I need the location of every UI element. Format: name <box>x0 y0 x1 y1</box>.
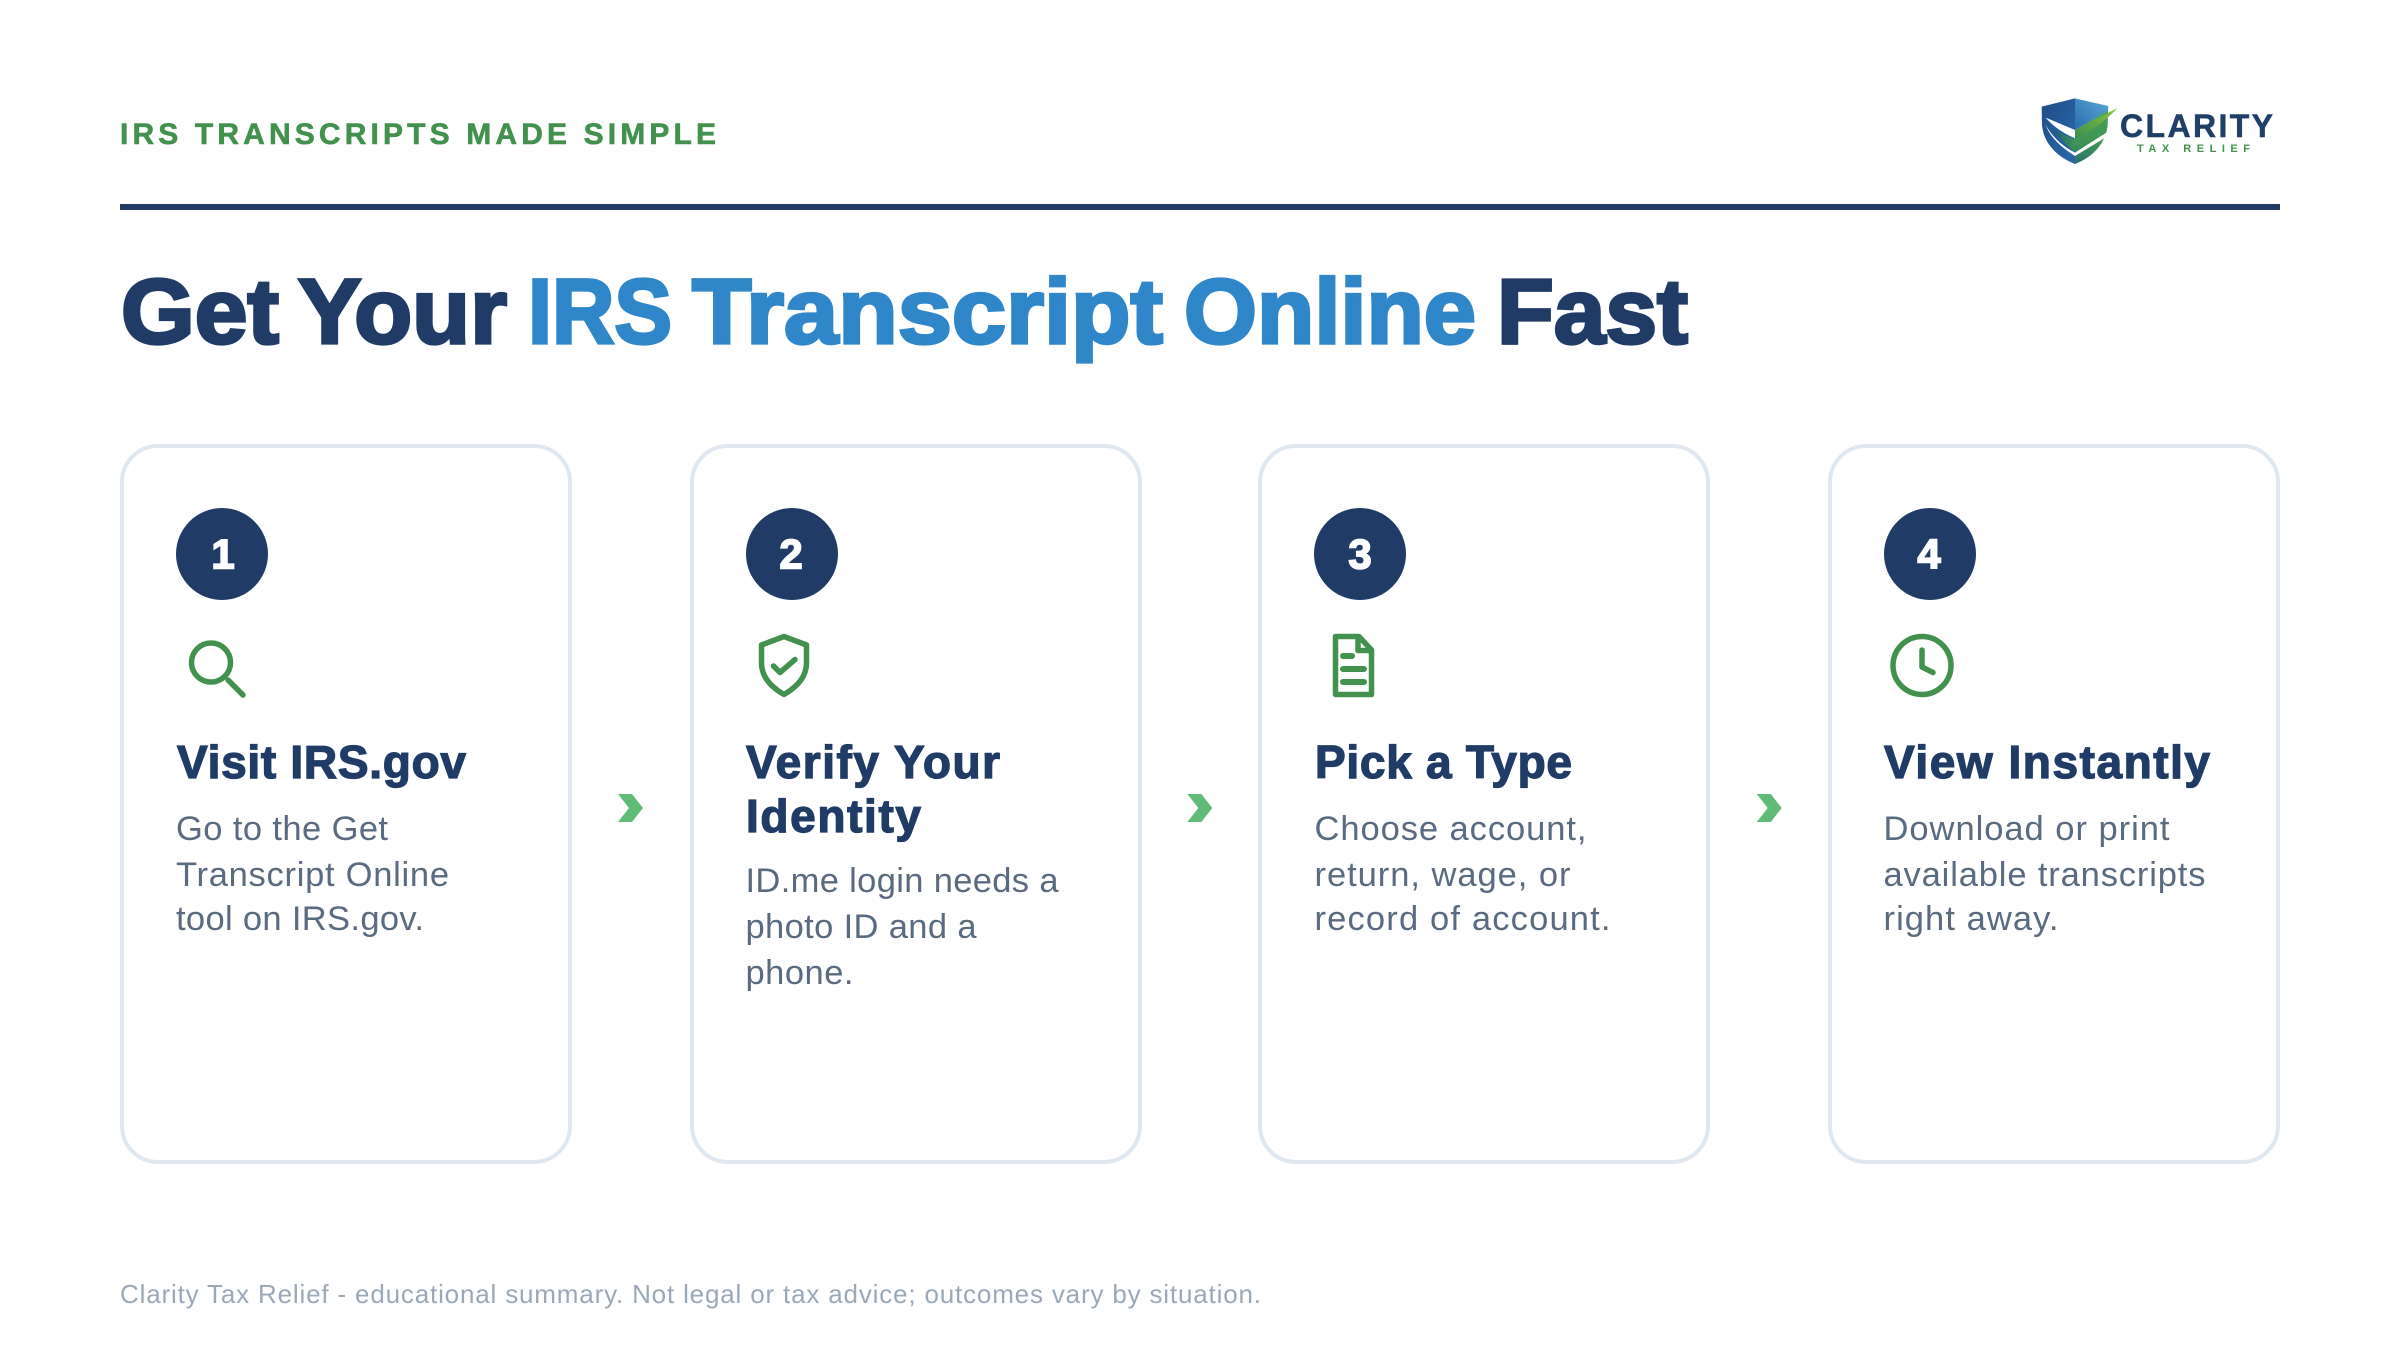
icon: document <box>1336 636 1372 694</box>
description: photo ID and a <box>746 908 977 946</box>
description: phone. <box>746 954 854 992</box>
title: Transcript <box>692 261 1163 363</box>
description: ID.me login needs a <box>746 862 1059 900</box>
title: IRS <box>528 261 672 363</box>
heading: Verify Your Identity: Identity <box>746 790 921 842</box>
step number 4: 4 <box>1917 530 1941 578</box>
logo wordmark: CLARITY <box>2120 108 2273 144</box>
heading: Verify Your Identity <box>746 736 1000 842</box>
heading: View Instantly: View Instantly <box>1884 736 2210 788</box>
description <box>746 862 1059 992</box>
step number 2 <box>746 508 838 600</box>
title: Get <box>121 261 279 363</box>
title: Fast <box>1497 261 1688 363</box>
heading: Verify Your Identity: Verify Your <box>746 736 1000 788</box>
title: Your <box>298 261 507 363</box>
arrow 3 <box>1757 794 1782 822</box>
description: tool on IRS.gov. <box>176 900 424 938</box>
panel: step 4 <box>1830 446 2278 1162</box>
title <box>121 261 1688 363</box>
description: Download or print <box>1884 810 2170 848</box>
description: Choose account, <box>1314 810 1586 848</box>
eyebrow heading: IRS TRANSCRIPTS MADE SIMPLE <box>120 118 716 151</box>
step number 1: 1 <box>211 530 235 578</box>
icon: shield check <box>762 636 806 694</box>
icon: magnifying glass <box>192 643 243 695</box>
description <box>1884 810 2206 938</box>
description: Transcript Online <box>176 856 449 894</box>
description: right away. <box>1884 900 2058 938</box>
step number 3: 3 <box>1348 530 1372 578</box>
description <box>1314 810 1610 938</box>
description: record of account. <box>1314 900 1610 938</box>
footer disclaimer: Clarity Tax Relief - educational summary. Not legal or tax advice; outcomes vary by situation. <box>120 1279 1261 1309</box>
step number 3 <box>1314 508 1406 600</box>
logo: Clarity Tax Relief <box>2042 98 2273 164</box>
header rule <box>120 204 2280 210</box>
panel: step 3 <box>1260 446 1708 1162</box>
step number 4 <box>1884 508 1976 600</box>
icon: clock <box>1893 636 1951 694</box>
arrow 2 <box>1187 794 1212 822</box>
heading: Pick a Type: Pick a Type <box>1315 736 1572 788</box>
step number 2: 2 <box>779 530 803 578</box>
panel: step 2 <box>692 446 1140 1162</box>
description <box>176 810 449 938</box>
title: Online <box>1184 261 1476 363</box>
description: return, wage, or <box>1314 856 1570 894</box>
icon: logo shield <box>2042 98 2117 164</box>
logo tagline: TAX RELIEF <box>2137 143 2250 155</box>
arrow 1 <box>618 794 643 822</box>
description: available transcripts <box>1884 856 2206 894</box>
step number 1 <box>176 508 268 600</box>
heading: Visit IRS.gov: Visit IRS.gov <box>177 736 466 788</box>
panel: step 1 <box>122 446 570 1162</box>
description: Go to the Get <box>176 810 388 848</box>
